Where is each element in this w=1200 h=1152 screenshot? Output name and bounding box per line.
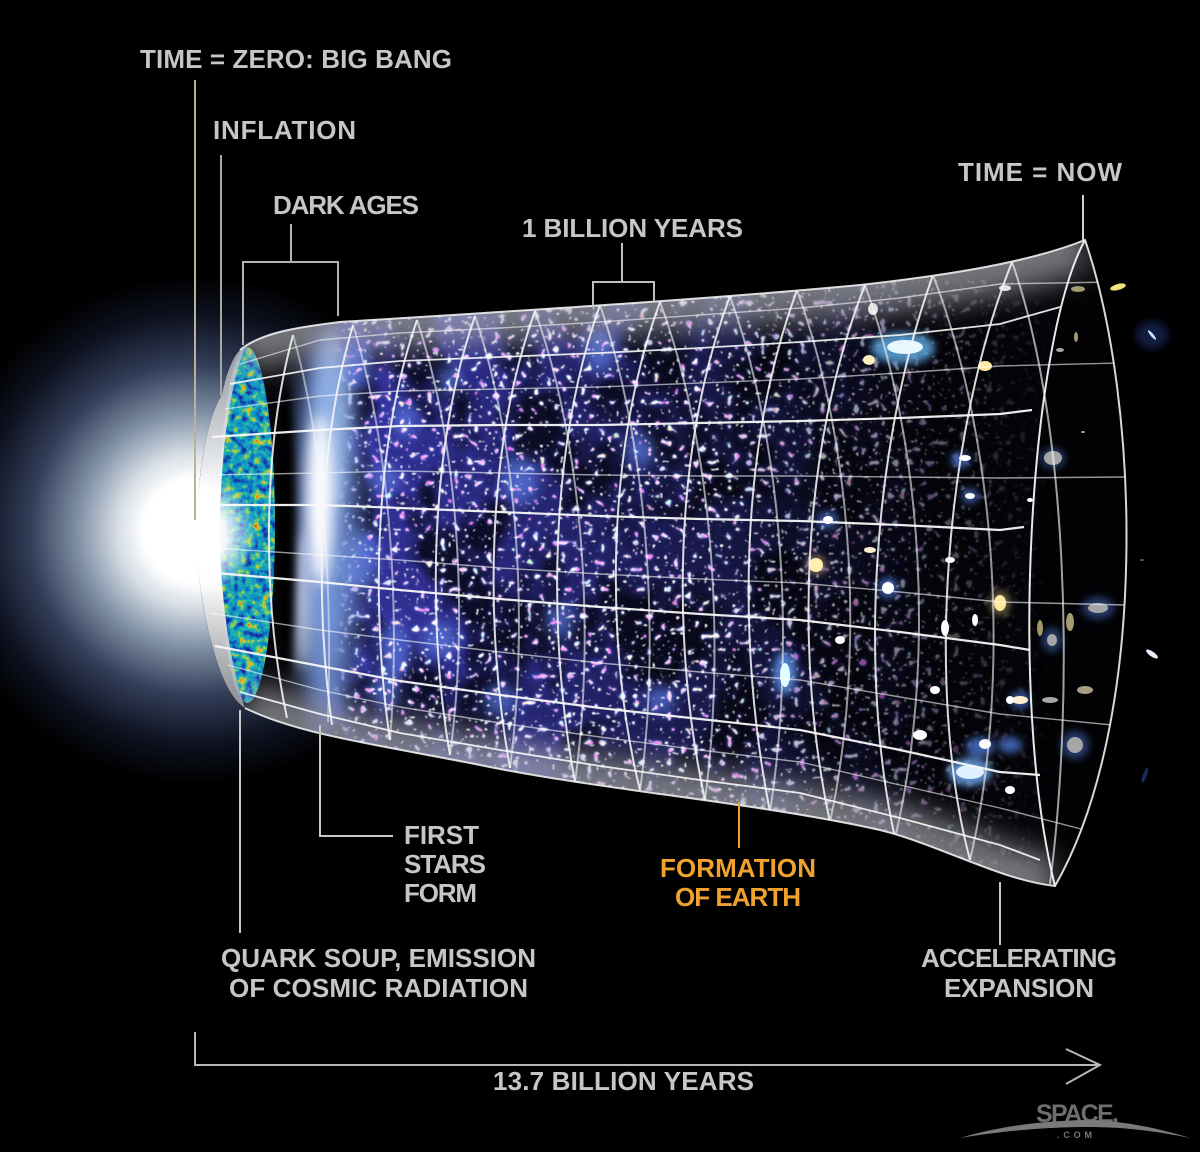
leader: inflation: [220, 155, 222, 396]
label: accelerating expansion: ACCELERATING: [921, 943, 1117, 973]
leader: formation of earth: [738, 802, 740, 848]
tube sheen: [240, 240, 1085, 886]
cosmic microwave background disc: [220, 347, 275, 703]
label: time now: TIME = NOW: [958, 157, 1122, 187]
label: formation of earth: OF EARTH: [675, 882, 801, 912]
label: first stars form: FORM: [404, 878, 477, 908]
nebula haze: [304, 286, 908, 817]
leader: quark soup: [239, 710, 241, 933]
label: first stars form: [404, 820, 486, 908]
grid latitude lines: [198, 282, 1125, 860]
coloured star speckle: [330, 280, 1070, 870]
big bang core light: [133, 457, 257, 613]
label: 1 billion years: 1 BILLION YEARS: [522, 213, 743, 243]
label: dark ages: DARK AGES: [273, 190, 419, 220]
label: time zero: TIME = ZERO: BIG BANG: [140, 44, 452, 74]
galaxy field: [195, 240, 1127, 886]
leader: time now: [1082, 195, 1084, 240]
universe funnel: [195, 240, 1127, 886]
funnel interior: [195, 240, 1127, 886]
first stars band: [294, 330, 355, 725]
inflation cap: [195, 348, 245, 708]
big bang glow: [0, 275, 450, 785]
label: quark soup: QUARK SOUP, EMISSION: [221, 943, 536, 973]
label: quark soup: OF COSMIC RADIATION: [229, 973, 528, 1003]
label: first stars form: FIRST: [404, 820, 479, 850]
label: accelerating expansion: EXPANSION: [944, 973, 1094, 1003]
blue nebula knots: [342, 326, 674, 716]
grid rings: [269, 240, 1085, 886]
dark ages band: [275, 380, 295, 680]
timeline arrow: [195, 1032, 1100, 1084]
label: quark soup: [221, 943, 536, 1003]
logo: space.com: [960, 1100, 1190, 1140]
galaxy halos: [773, 332, 1114, 786]
logo: space.com: .COM: [1057, 1130, 1092, 1140]
label: 13.7 billion years: 13.7 BILLION YEARS: [493, 1066, 754, 1096]
bracket: dark ages: [243, 224, 338, 345]
leader: time zero: [194, 80, 196, 520]
bracket: 1 billion years: [593, 243, 654, 306]
galaxies outside funnel: [1109, 282, 1168, 783]
funnel outline: [240, 240, 1127, 886]
label: inflation: INFLATION: [213, 115, 356, 145]
leader: first stars: [320, 725, 393, 836]
leader: accelerating expansion: [999, 882, 1001, 945]
label: accelerating expansion: [921, 943, 1117, 1003]
bright galaxies: [780, 285, 1108, 794]
label: formation of earth: [660, 853, 816, 912]
end ring dark opening: [1034, 242, 1118, 883]
label: formation of earth: FORMATION: [660, 853, 816, 883]
logo: space.com: SPACE.: [1036, 1100, 1119, 1128]
label: first stars form: STARS: [404, 849, 486, 879]
